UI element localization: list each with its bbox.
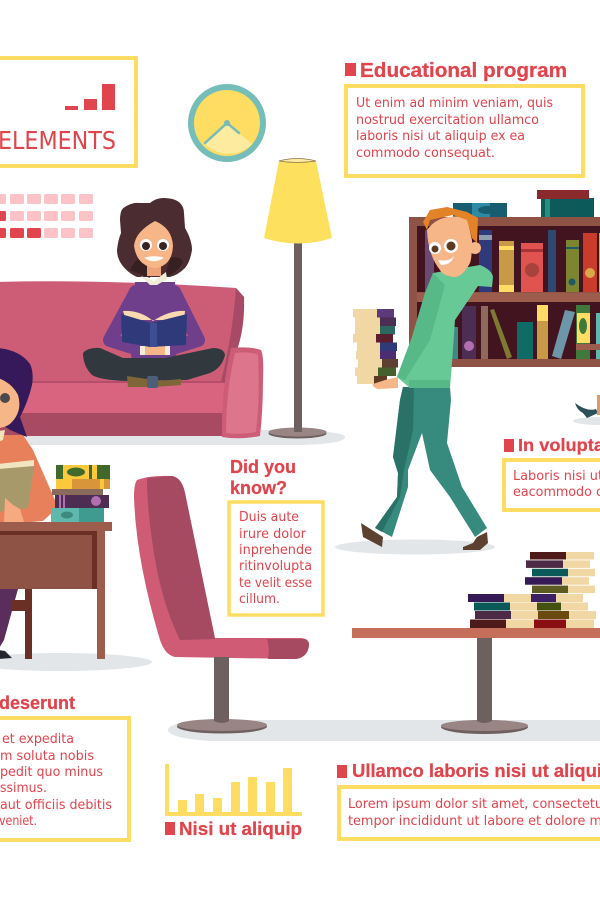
lounge chair — [134, 476, 309, 734]
calendar grid — [0, 194, 93, 238]
hand — [373, 377, 398, 389]
man carrying books — [353, 207, 493, 550]
hoodie — [397, 265, 493, 388]
lower shelf books — [450, 305, 600, 359]
text box: did you know — [229, 502, 323, 615]
text box: deserunt — [0, 718, 129, 840]
hair — [117, 198, 192, 277]
text box: did you know: Duis aute — [239, 510, 299, 525]
hand — [4, 498, 24, 522]
trousers — [375, 387, 487, 537]
heading: nisi ut aliquip: Nisi ut aliquip — [179, 819, 302, 839]
arms and torso — [130, 282, 178, 366]
coffee table — [352, 552, 600, 734]
text box: deserunt: pedit quo minus — [0, 765, 103, 780]
sweater — [0, 435, 55, 523]
text box: deserunt: m soluta nobis — [0, 749, 94, 764]
open book — [0, 466, 34, 512]
heading: did you know — [230, 457, 296, 498]
sofa — [0, 281, 263, 438]
face — [427, 216, 472, 277]
legs — [83, 348, 225, 381]
carried books — [353, 309, 398, 384]
cuffs and hands — [140, 346, 170, 355]
stacked books on table — [468, 552, 596, 628]
hair — [423, 207, 478, 243]
bookshelf — [409, 190, 600, 367]
text box: did you know: irure dolor — [239, 527, 307, 542]
desk — [0, 531, 97, 589]
books on top of shelf — [453, 190, 594, 217]
text box: did you know: inprehende — [239, 543, 312, 558]
back leg — [25, 589, 32, 659]
floor shadows — [0, 417, 600, 741]
text box: educational program: commodo consequat. — [356, 146, 495, 161]
desk with seated woman — [0, 348, 112, 659]
heading: did you know: Did you — [230, 457, 296, 477]
woman's legs and shoe — [0, 589, 18, 650]
text box: educational program: Ut enim ad minim veniam, quis — [356, 96, 553, 111]
collar — [141, 272, 167, 285]
title text: ELEMENTS — [0, 126, 116, 155]
heading: ullamco laboris: Ullamco laboris nisi ut aliqui — [352, 761, 600, 781]
bar chart — [165, 764, 302, 816]
text box: educational program — [346, 86, 583, 176]
face — [0, 378, 19, 428]
shoes — [361, 523, 383, 547]
heading: educational program: Educational program — [360, 60, 567, 82]
text box: deserunt: aut officiis debitis — [0, 798, 112, 813]
neck — [147, 262, 161, 276]
upper shelf books — [425, 230, 600, 292]
icon: signal bars — [65, 84, 115, 110]
text box: did you know: te velit esse — [239, 576, 312, 591]
book — [123, 311, 185, 321]
text box: educational program: nostrud exercitation ullamco — [356, 113, 539, 128]
heading: in volupta: In volupta — [518, 435, 600, 455]
text box: educational program: laboris nisi ut aliquip ex ea — [356, 129, 525, 144]
text box: deserunt: ssimus. — [0, 781, 47, 796]
text box: did you know: ritinvolupta — [239, 559, 312, 574]
floor lamp — [264, 158, 332, 438]
text box: in volupta — [504, 460, 600, 510]
woman reading on sofa — [83, 198, 225, 388]
text box: deserunt: veniet. — [0, 814, 37, 829]
heading: did you know: know? — [230, 478, 287, 498]
hair — [0, 348, 33, 437]
text box: deserunt: et expedita — [2, 732, 74, 747]
heading: deserunt: deserunt — [0, 693, 75, 713]
text box: ullamco laboris — [339, 787, 600, 839]
text box: did you know: cillum. — [239, 592, 280, 607]
books on desk — [51, 465, 110, 522]
panel: title box — [0, 58, 136, 166]
woman's foot at right edge — [575, 395, 600, 418]
face — [134, 221, 173, 268]
icon: wall clock — [188, 84, 266, 162]
